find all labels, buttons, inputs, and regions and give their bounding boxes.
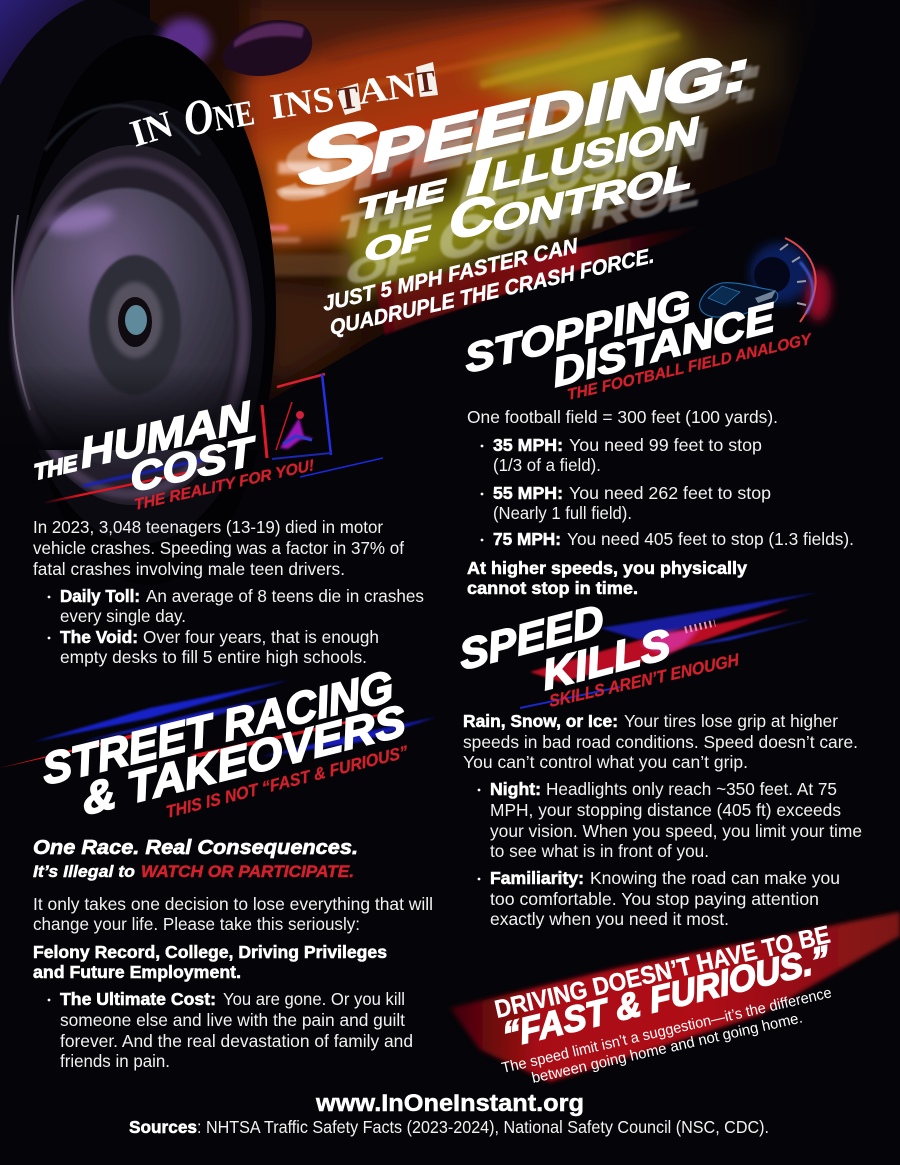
letter t on scrap: T xyxy=(335,78,361,117)
what is at stake: and Future Employment. xyxy=(33,962,241,982)
bullet: familiarity xyxy=(478,868,840,929)
figure head xyxy=(296,411,304,419)
main title: the illusion: LLUSION xyxy=(491,108,700,198)
frame left xyxy=(262,405,267,458)
bullet: 35 mph: (1/3 of a field). xyxy=(493,455,601,475)
rim disc xyxy=(18,188,234,468)
bullet: daily toll: every single day. xyxy=(60,606,186,626)
bullet: night: your vision. When you speed, you limit your time xyxy=(490,821,862,841)
title drop shadow xyxy=(375,44,756,246)
hub cap xyxy=(125,305,147,335)
title ghost shadow: I xyxy=(455,164,486,224)
title drop shadow: ONTROL xyxy=(497,163,697,246)
car windshield xyxy=(708,286,740,305)
hub light xyxy=(108,282,162,358)
car outline xyxy=(700,283,778,317)
bullet: night: to see what is in front of you. xyxy=(490,841,709,861)
gauge ticks xyxy=(780,244,806,305)
text block: street racing xyxy=(33,836,433,1071)
legal warning xyxy=(33,862,354,881)
rain snow ice: speeds in bad road conditions. Speed doesn’t care. xyxy=(463,732,858,752)
frame right xyxy=(322,374,331,455)
frame bottom xyxy=(272,453,331,459)
mirror purple top xyxy=(234,23,304,48)
bullet: 55 mph xyxy=(481,483,771,523)
bullet: familiarity: too comfortable. You stop paying attention xyxy=(490,889,819,909)
bullet: the void: empty desks to fill 5 entire high schools. xyxy=(60,647,367,667)
bullet: 35 mph: 35 MPH: xyxy=(493,435,563,455)
legal warning: It’s Illegal to xyxy=(33,862,135,881)
title ghost shadow: C xyxy=(436,201,489,273)
bullet: night: Headlights only reach ~350 feet. At 75 xyxy=(546,779,837,799)
purple roof highlight xyxy=(0,0,85,85)
bullet: 55 mph: (Nearly 1 full field). xyxy=(493,503,632,523)
heading: speed kills: KILLS xyxy=(539,620,673,699)
title ghost shadow: THE xyxy=(338,188,436,247)
rim sheen xyxy=(44,201,116,239)
bullet: ultimate cost: forever. And the real devastation of family and xyxy=(60,1031,413,1051)
main title: of control: C xyxy=(448,183,496,251)
red band xyxy=(450,912,900,1082)
title drop shadow: LLUSION xyxy=(496,114,705,204)
frame top xyxy=(277,374,325,387)
bullet: the void xyxy=(48,627,379,667)
bullet: daily toll xyxy=(48,586,424,626)
background photo: speeding car with motion blur xyxy=(150,0,804,402)
footer xyxy=(129,1090,769,1137)
bullet: 55 mph: You need 262 feet to stop xyxy=(569,483,771,503)
website: www.InOneInstant.org xyxy=(315,1090,584,1117)
text block: human cost: In 2023, 3,048 teenagers (13-19) died in motor xyxy=(33,517,383,537)
bullet: 75 mph: 75 MPH: xyxy=(493,529,561,549)
title ghost shadow xyxy=(273,44,764,292)
bullet: daily toll: An average of 8 teens die in crashes xyxy=(146,586,424,606)
conclusion xyxy=(467,558,747,598)
heading: stopping distance: STOPPING xyxy=(462,282,693,382)
what is at stake xyxy=(33,942,387,982)
rain snow ice: Rain, Snow, or Ice: xyxy=(463,711,618,731)
rain snow ice: Your tires lose grip at higher xyxy=(624,711,838,731)
main title: of control: ONTROL xyxy=(492,157,692,240)
side mirror xyxy=(222,20,312,76)
car headlight xyxy=(755,290,776,303)
main title: the illusion: THE xyxy=(357,174,448,227)
hub ring large xyxy=(89,255,181,395)
bullet: 75 mph: You need 405 feet to stop (1.3 fields). xyxy=(567,529,854,549)
heading: street racing and takeovers: STREET RACING xyxy=(39,662,396,795)
main title: speeding xyxy=(296,38,751,204)
series name: in one instant xyxy=(125,62,438,156)
bullet: ultimate cost xyxy=(48,989,413,1071)
bullet: daily toll: Daily Toll: xyxy=(60,586,140,606)
callout line 4: between going home and not going home. xyxy=(530,1009,804,1087)
heading: stopping distance: THE FOOTBALL FIELD ANALOGY xyxy=(566,330,814,404)
title ghost shadow: S xyxy=(273,113,362,223)
main title: of control: OF xyxy=(364,220,433,269)
ransom-note scrap 1 xyxy=(336,83,361,115)
gauge arc xyxy=(785,238,816,322)
title ghost shadow: OF xyxy=(345,238,419,292)
title ghost shadow: PEEDING: xyxy=(352,44,764,202)
text block: street racing: It only takes one decision to lose everything that will xyxy=(33,894,433,914)
text block: stopping distance xyxy=(467,407,854,598)
letters: ins: INS xyxy=(268,78,336,127)
text block: human cost: fatal crashes involving male teen drivers. xyxy=(33,559,345,579)
dial centre xyxy=(754,257,790,293)
tyre xyxy=(15,100,265,544)
bullet: familiarity: Familiarity: xyxy=(490,868,584,888)
heading: stopping distance xyxy=(462,282,814,404)
text block: stopping distance: One football field = 300 feet (100 yards). xyxy=(467,407,778,427)
word: in: IN xyxy=(125,103,178,156)
callout line 2: “FAST & FURIOUS.” xyxy=(500,937,832,1056)
main title: speeding: S xyxy=(296,102,379,204)
figure base xyxy=(283,436,312,444)
bullet: ultimate cost: friends in pain. xyxy=(60,1051,170,1071)
title ghost shadow: LLUSION xyxy=(483,120,709,216)
icon: human cost warning frame xyxy=(262,374,331,459)
title group xyxy=(125,38,764,292)
bullet: ultimate cost: someone else and live with the pain and guilt xyxy=(60,1010,405,1030)
sources: Sources xyxy=(129,1117,197,1137)
sources: : NHTSA Traffic Safety Facts (2023-2024), National Safety Council (NSC, CDC). xyxy=(197,1117,769,1137)
hub dark xyxy=(118,297,152,347)
heading: speed kills xyxy=(456,595,741,711)
bullet: 55 mph: 55 MPH: xyxy=(493,483,563,503)
bullet: ultimate cost: You are gone. Or you kill xyxy=(223,989,405,1009)
text block: street racing: change your life. Please take this seriously: xyxy=(33,914,360,934)
figure triangle xyxy=(276,402,292,450)
heading: street racing and takeovers: & TAKEOVERS xyxy=(79,696,409,825)
bullet: night: Night: xyxy=(490,779,541,799)
main title: the illusion: I xyxy=(465,150,494,205)
subtitle: crash force: QUADRUPLE THE CRASH FORCE. xyxy=(329,244,656,340)
heading: human cost: HUMAN xyxy=(78,392,255,477)
heading: speed kills: SPEED xyxy=(456,595,607,679)
car body and front wheel xyxy=(0,0,312,585)
heading: human cost: THE REALITY FOR YOU! xyxy=(133,457,315,514)
heading: human cost xyxy=(33,392,315,514)
rim mid ring xyxy=(16,162,244,494)
heading: speed kills: SKILLS AREN’T ENOUGH xyxy=(548,650,741,711)
heading: human cost: COST xyxy=(128,429,260,501)
conclusion: At higher speeds, you physically xyxy=(467,558,747,578)
bullet: night xyxy=(478,779,862,861)
subtitle: crash force: JUST 5 MPH FASTER CAN xyxy=(321,234,580,316)
bullet: familiarity: Knowing the road can make you xyxy=(590,868,840,888)
title ghost shadow: ONTROL xyxy=(484,171,700,261)
rain snow ice xyxy=(463,711,858,772)
heading decoration: human cost streaks xyxy=(43,458,383,503)
tyre top highlight xyxy=(45,106,200,155)
text block: speed kills xyxy=(463,711,862,929)
heading: street racing and takeovers: THIS IS NOT “FAST & FURIOUS” xyxy=(165,742,409,822)
rain snow ice: You can’t control what you can’t grip. xyxy=(463,752,748,772)
main title: the illusion xyxy=(357,108,700,227)
sub-heading: One Race. Real Consequences. xyxy=(33,836,358,859)
car body panel xyxy=(0,0,270,450)
letter t on scrap: T xyxy=(413,64,438,100)
what is at stake: Felony Record, College, Driving Privileges xyxy=(33,942,387,962)
main title: of control xyxy=(364,157,692,269)
icon: speedometer and car xyxy=(700,238,831,322)
door handle xyxy=(232,157,250,169)
text block: human cost xyxy=(33,517,424,667)
callout: driving doesn't have to be fast and furious xyxy=(450,912,900,1087)
fade to black xyxy=(0,365,300,450)
rim left edge highlight xyxy=(12,215,30,410)
text block: human cost: vehicle crashes. Speeding was a factor in 37% of xyxy=(33,538,404,558)
blue dial glow xyxy=(750,243,810,303)
bullet: night: MPH, your stopping distance (405 ft) exceeds xyxy=(490,800,841,820)
callout line 3: The speed limit isn’t a suggestion—it’s the difference xyxy=(500,984,833,1077)
heading: human cost: THE xyxy=(33,450,80,485)
title drop shadow: PEEDING: xyxy=(375,44,756,191)
bullet: 35 mph xyxy=(481,435,762,475)
word: one: ONE xyxy=(179,80,258,147)
heading decoration: street racing streaks xyxy=(0,680,437,768)
heading decoration: speed kills streaks xyxy=(520,592,820,708)
bullet: the void: Over four years, that is enough xyxy=(143,627,379,647)
gauge inner blue arc xyxy=(800,262,813,314)
windshield highlight xyxy=(159,18,211,66)
legal warning: WATCH OR PARTICIPATE. xyxy=(141,862,354,881)
bullet: familiarity: exactly when you need it most. xyxy=(490,909,729,929)
wheel arch xyxy=(20,35,276,585)
letters: an: AN xyxy=(356,64,419,112)
heading: stopping distance: DISTANCE xyxy=(550,295,779,396)
ransom-note scrap 2 xyxy=(416,62,438,97)
conclusion: cannot stop in time. xyxy=(467,578,638,598)
bullet: the void: The Void: xyxy=(60,627,138,647)
main title: speeding: PEEDING: xyxy=(370,38,751,185)
callout line 1: DRIVING DOESN’T HAVE TO BE xyxy=(492,921,833,1024)
rim outer xyxy=(12,145,252,505)
glow xyxy=(805,269,831,321)
bullet: ultimate cost: The Ultimate Cost: xyxy=(60,989,216,1009)
figure xyxy=(280,418,314,449)
subtitle red band xyxy=(375,224,705,335)
bullet: 35 mph: You need 99 feet to stop xyxy=(569,435,762,455)
